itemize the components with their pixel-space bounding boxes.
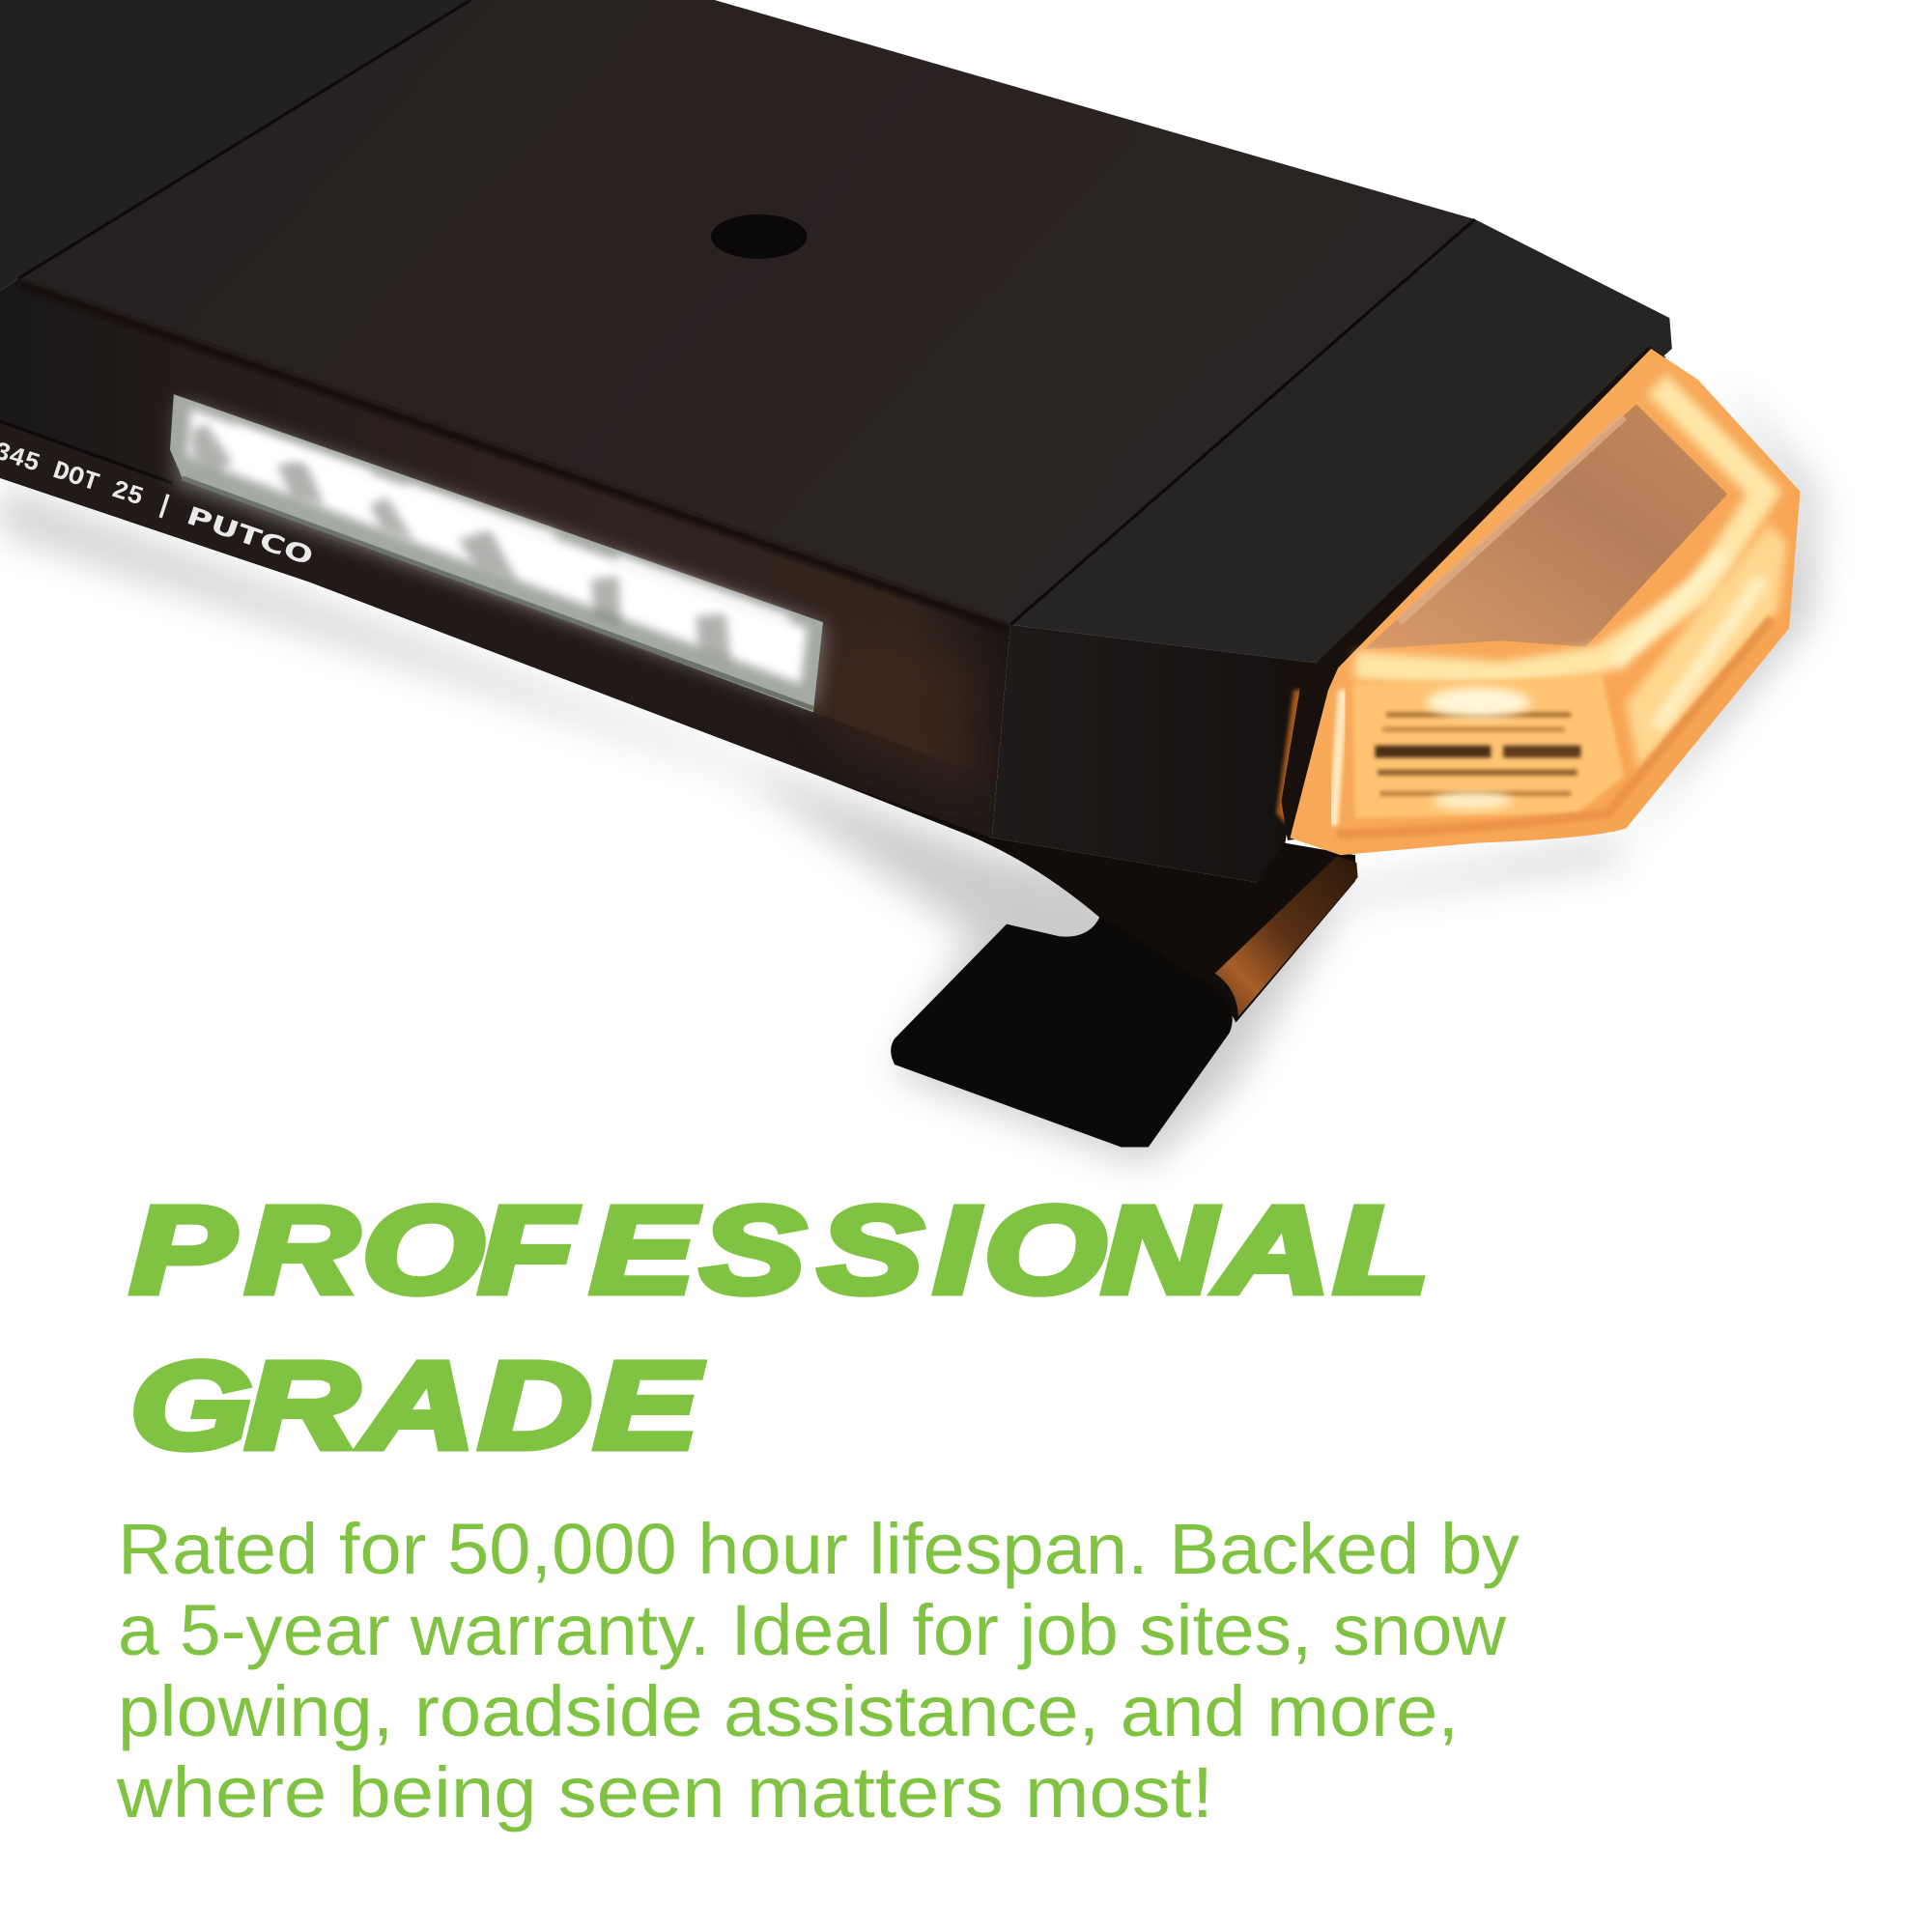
- lens body: [1290, 349, 1801, 855]
- white LED body: [170, 394, 823, 712]
- bracket strap: [813, 774, 1355, 1023]
- hotspot lower: [1433, 792, 1512, 810]
- end cap front: [992, 625, 1316, 882]
- heading: [130, 1181, 1430, 1475]
- hotspot: [1427, 688, 1530, 717]
- body line 2: a 5-year warranty. Ideal for job sites, snow: [118, 1590, 1507, 1670]
- lens top inner panel: [1364, 404, 1727, 649]
- body line 1: Rated for 50,000 hour lifespan. Backed by: [118, 1509, 1520, 1589]
- white LED top highlights: [234, 431, 788, 622]
- front lower strip: [0, 421, 992, 838]
- seam lines: [0, 0, 1475, 625]
- white LED module: [170, 394, 826, 712]
- mounting bracket: [813, 774, 1358, 1147]
- lens top panel highlight: [1399, 416, 1624, 622]
- LED dark reflector bars: [1375, 715, 1580, 793]
- brand logo text: PUTCO: [183, 501, 317, 572]
- bar left section top: [0, 0, 470, 291]
- mounting hole: [711, 214, 807, 259]
- white LED outer glow: [175, 401, 826, 708]
- warm reflection around LED: [826, 629, 985, 801]
- lens bright rim: [1355, 384, 1765, 675]
- amber reflection on end cap: [1276, 690, 1306, 826]
- bracket foot: [891, 916, 1233, 1147]
- white LED reflector details: [191, 424, 730, 663]
- body paragraph: [116, 1509, 1520, 1833]
- side facet white streaks: [1614, 554, 1762, 727]
- body line 4: where being seen matters most!: [116, 1752, 1213, 1833]
- side facet bright area: [1627, 524, 1786, 770]
- white LED bright core: [187, 409, 807, 684]
- front face: [0, 278, 1010, 838]
- lens dark frame: [1282, 346, 1665, 840]
- heading line 1: PROFESSIONAL: [130, 1181, 1430, 1320]
- body line 3: plowing, roadside assistance, and more,: [118, 1671, 1459, 1751]
- heading line 2: GRADE: [130, 1337, 703, 1475]
- product photo: roof light bar: [0, 0, 1817, 1164]
- end cap top: [1010, 219, 1672, 663]
- lens left edge: [1333, 690, 1343, 826]
- crease highlight: [18, 283, 1010, 630]
- soft drop shadow: [0, 382, 1817, 1164]
- white LED bottom rim: [183, 478, 813, 708]
- lens outer lip: [1337, 618, 1772, 835]
- bracket copper reflection: [1215, 856, 1358, 1016]
- strip text: part number and brand: [0, 438, 317, 572]
- front LED bright area: [1352, 675, 1624, 818]
- amber lens: [1282, 346, 1801, 855]
- bar centre section top: [18, 0, 1475, 625]
